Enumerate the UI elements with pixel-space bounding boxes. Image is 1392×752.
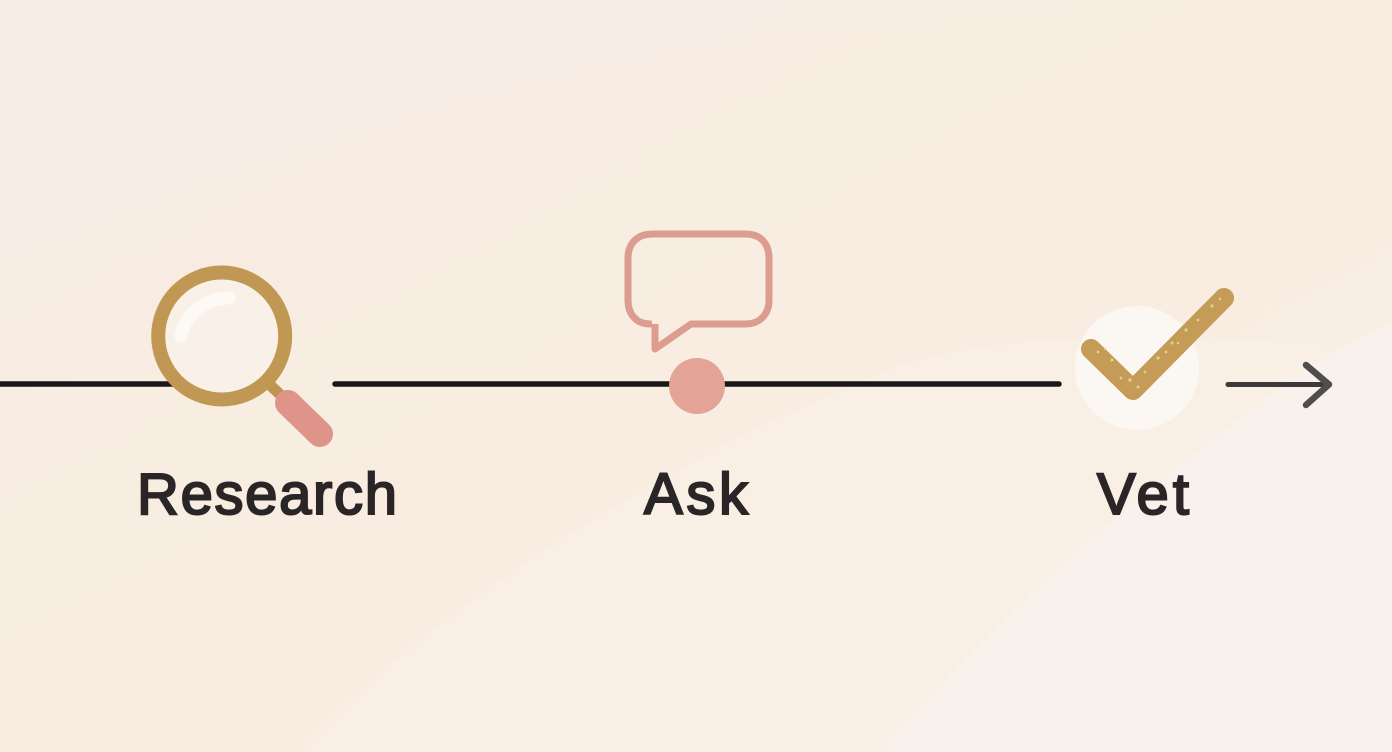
label: Ask: Ask xyxy=(644,462,749,527)
label: Research: Research xyxy=(137,462,397,527)
icon: pink timeline dot xyxy=(669,358,725,414)
icon: magnifying glass xyxy=(158,272,320,434)
icon: speech bubble xyxy=(628,234,769,349)
icon: white circle and gold check mark xyxy=(1075,298,1224,430)
arrow xyxy=(1228,365,1329,405)
label: Vet: Vet xyxy=(1097,462,1189,527)
timeline line xyxy=(0,381,1059,387)
